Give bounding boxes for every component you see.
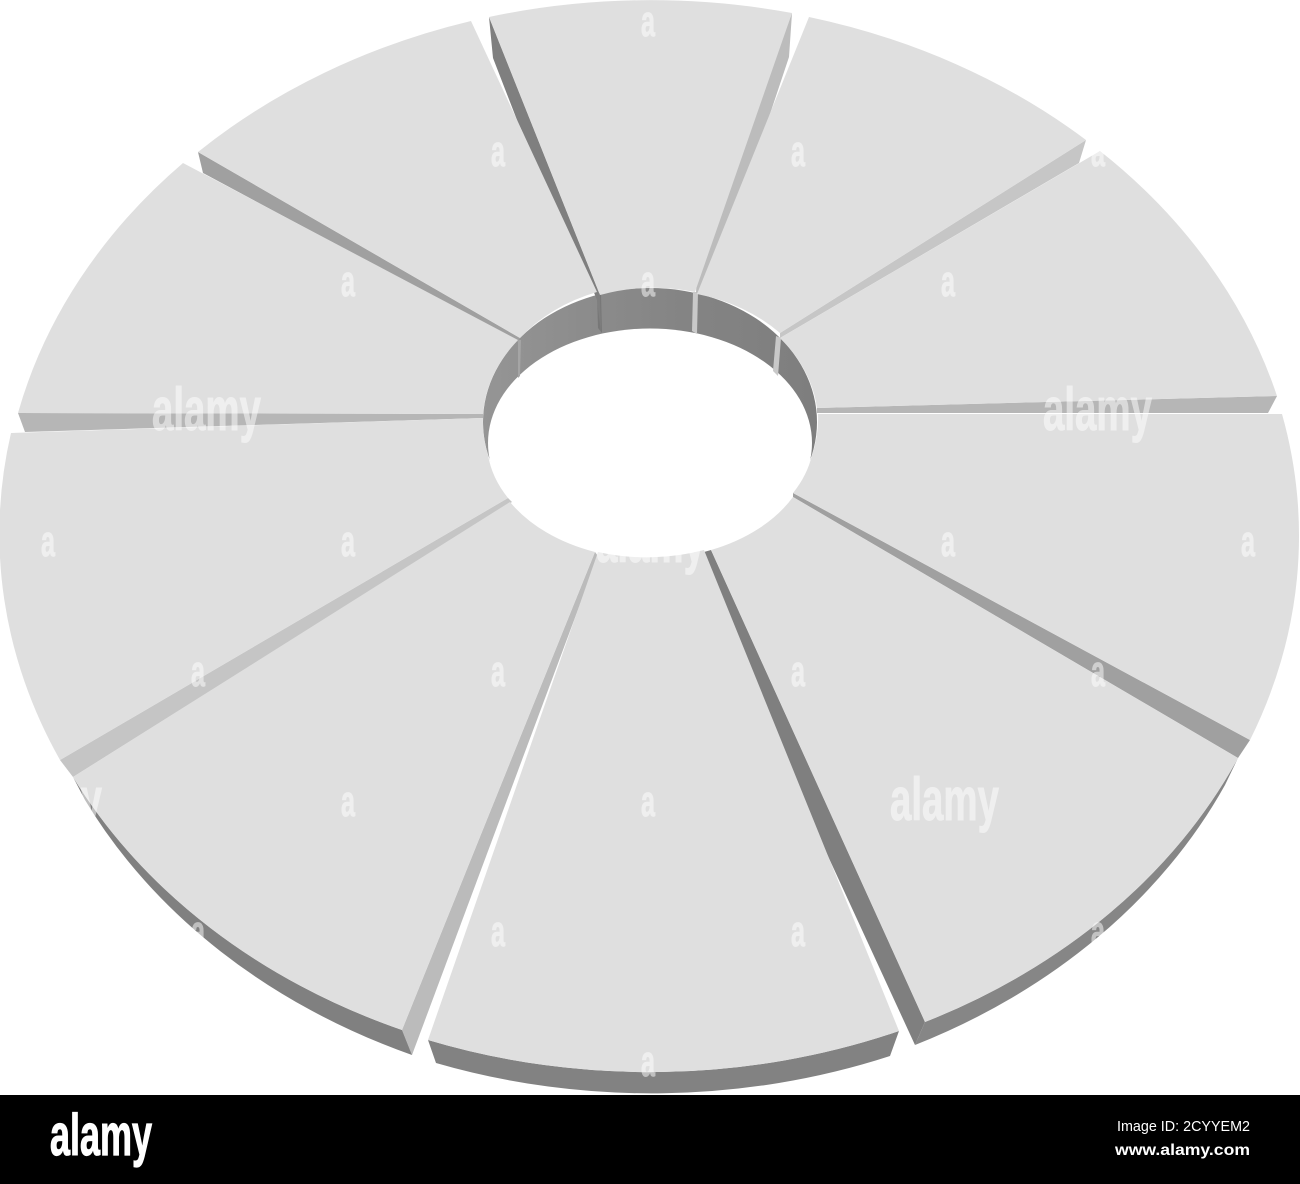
segment: upper right (697, 17, 1086, 333)
watermarks: a (791, 907, 805, 956)
watermarks: a (791, 647, 805, 696)
segment: upper left (198, 21, 597, 338)
watermarks: a (641, 777, 655, 826)
segment: lower right (711, 497, 1238, 1022)
segment: lower left (73, 502, 595, 1030)
footer logo: alamy (50, 1103, 152, 1168)
segment: top (489, 0, 792, 295)
segment: right upper (780, 151, 1277, 408)
watermarks: a (791, 127, 805, 176)
watermarks: alamy (890, 766, 999, 833)
segment: left lower (0, 418, 508, 760)
watermarks: a (191, 647, 205, 696)
watermarks: a (1241, 517, 1255, 566)
segment: bottom (428, 550, 899, 1072)
watermarks: a (641, 1037, 655, 1086)
footer bar (0, 1095, 1300, 1184)
watermarks: alamy (596, 508, 705, 575)
watermarks: a (41, 517, 55, 566)
segment: right lower (793, 414, 1299, 740)
hole inner wall (483, 288, 817, 558)
image id: Image ID: 2CYYEM2 (1117, 1118, 1250, 1135)
watermarks: a (191, 907, 205, 956)
watermarks: a (341, 257, 355, 306)
segment: left upper (18, 163, 518, 414)
watermarks: a (641, 257, 655, 306)
watermarks: a (1091, 907, 1105, 956)
watermarks: alamy (152, 376, 261, 443)
watermarks: a (941, 517, 955, 566)
watermarks: a (1091, 647, 1105, 696)
watermarks: a (491, 647, 505, 696)
watermarks: alamy (1043, 376, 1152, 443)
watermarks: a (1091, 127, 1105, 176)
watermarks: a (491, 127, 505, 176)
website: www.alamy.com (1114, 1142, 1250, 1159)
watermarks: a (341, 777, 355, 826)
watermarks: a (941, 257, 955, 306)
watermarks: a (491, 907, 505, 956)
watermarks: a (341, 517, 355, 566)
